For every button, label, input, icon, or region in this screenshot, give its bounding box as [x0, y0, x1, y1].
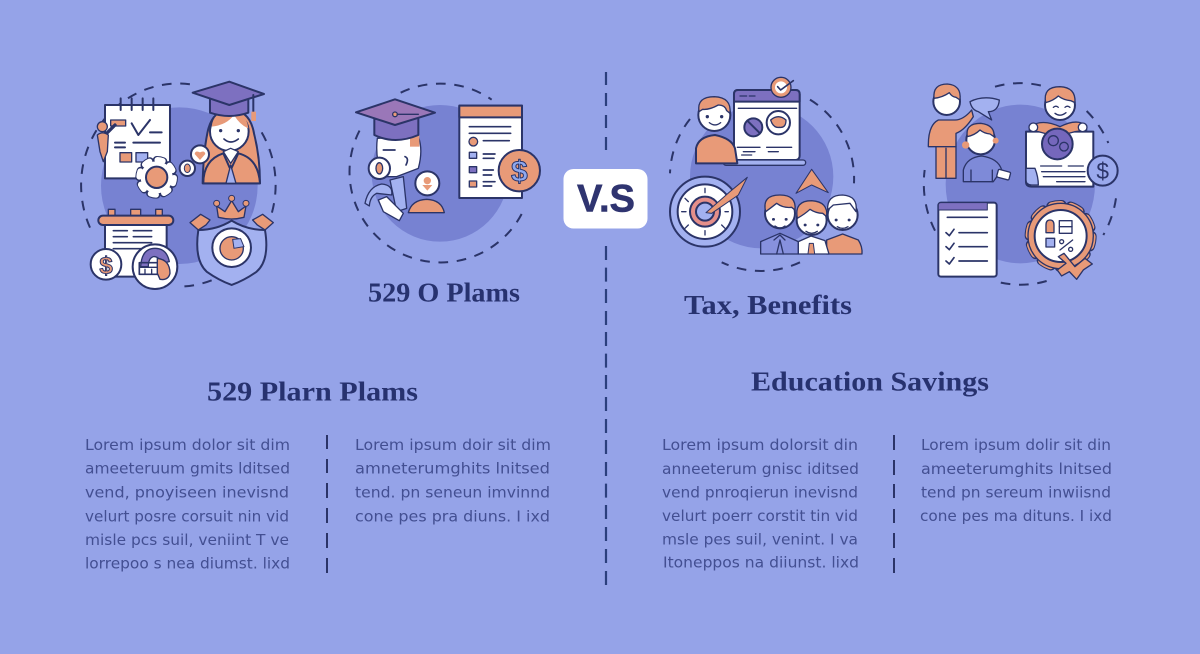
team of three: [761, 195, 862, 254]
person badge on stand: [408, 171, 444, 213]
text block: left column two: amneterumghits lnitsed: [355, 460, 550, 478]
text block: left column one: misle pcs suil, veniint T ve: [85, 531, 289, 549]
check badge: [771, 77, 793, 97]
text block: right column one: vend pnroqierun inevisnd: [662, 483, 858, 501]
checklist: [938, 203, 997, 277]
graduate girl: [193, 82, 264, 183]
heading: 529 O Plams: 529 O Plams: [368, 276, 520, 308]
browser window on laptop: [723, 90, 806, 165]
calendar: [91, 209, 177, 289]
dollar coin: [1088, 156, 1118, 186]
text block: left column one: ameeteruum gmits lditsed: [85, 460, 290, 478]
notepad: [97, 98, 170, 178]
V.S badge: V.S: [577, 178, 635, 221]
text block: right column one: Itoneppos na diiunst. lixd: [663, 553, 859, 571]
graduate figure: [356, 99, 435, 221]
text block: left column two: tend. pn seneun imvinnd: [355, 483, 550, 501]
text block: left column two: Lorem ipsum doir sit dim: [355, 436, 551, 454]
text block: right column one: msle pes suil, venint. I va: [662, 530, 858, 548]
dollar coin: $: [1096, 158, 1109, 184]
text block: left column one: vend, pnoyiseen inevisnd: [85, 483, 289, 501]
text block: right column two: ameeterumghits lnitsed: [921, 460, 1112, 478]
text block: right column one: velurt poerr corstit tin vid: [662, 507, 858, 525]
column divider right: [893, 435, 895, 573]
heading: Tax Benefits: Tax, Benefits: [684, 289, 852, 320]
text block: left column one: [85, 436, 290, 573]
man: [696, 97, 737, 163]
text block: left column two: cone pes pra diuns. I ixd: [355, 507, 550, 525]
gear: [139, 160, 174, 195]
shield with crown: [190, 195, 273, 285]
target with arrow: [670, 177, 747, 247]
text block: right column one: anneeterum gnisc iditsed: [662, 460, 859, 478]
icon cluster: 529 plan graduate, notepad, calendar and shield: [81, 82, 276, 289]
text block: left column two: [355, 436, 551, 525]
text block: left column one: lorrepoo s nea diumst. lixd: [85, 555, 290, 573]
icon cluster: tax benefits man, browser, target and team: [670, 77, 862, 271]
icon cluster: graduate with plan checklist and dollar coin: [350, 84, 540, 262]
percent gear with cross: [1028, 203, 1093, 279]
chevron: [796, 169, 828, 193]
certificate and man: [1026, 87, 1093, 187]
text block: left column one: Lorem ipsum dolor sit dim: [85, 436, 290, 454]
column divider left: [326, 435, 328, 573]
adult with speech bubble: [928, 84, 999, 178]
dollar coin: $: [511, 155, 528, 188]
text block: right column two: [920, 436, 1112, 525]
text block: right column two: cone pes ma dituns. I ixd: [920, 507, 1112, 525]
small badges: [180, 145, 209, 176]
text block: right column one: [662, 436, 859, 571]
center divider: [605, 72, 607, 585]
checklist document: [459, 106, 522, 198]
dollar coin: [499, 150, 540, 191]
heading: Education Savings: Education Savings: [751, 366, 989, 396]
text block: right column two: tend pn sereum inwiisnd: [921, 483, 1111, 501]
calendar: $: [99, 252, 113, 279]
icon cluster: education savings family, certificate, checklist and gear: [924, 83, 1118, 285]
text block: right column two: Lorem ipsum dolir sit din: [921, 436, 1111, 454]
heading: 529 Plarn Plams: 529 Plarn Plams: [207, 376, 418, 406]
text block: right column one: Lorem ipsum dolorsit din: [662, 436, 858, 454]
V.S badge: [564, 169, 648, 228]
text block: left column one: velurt posre corsuit nin vid: [85, 507, 289, 525]
child: [962, 123, 1011, 182]
